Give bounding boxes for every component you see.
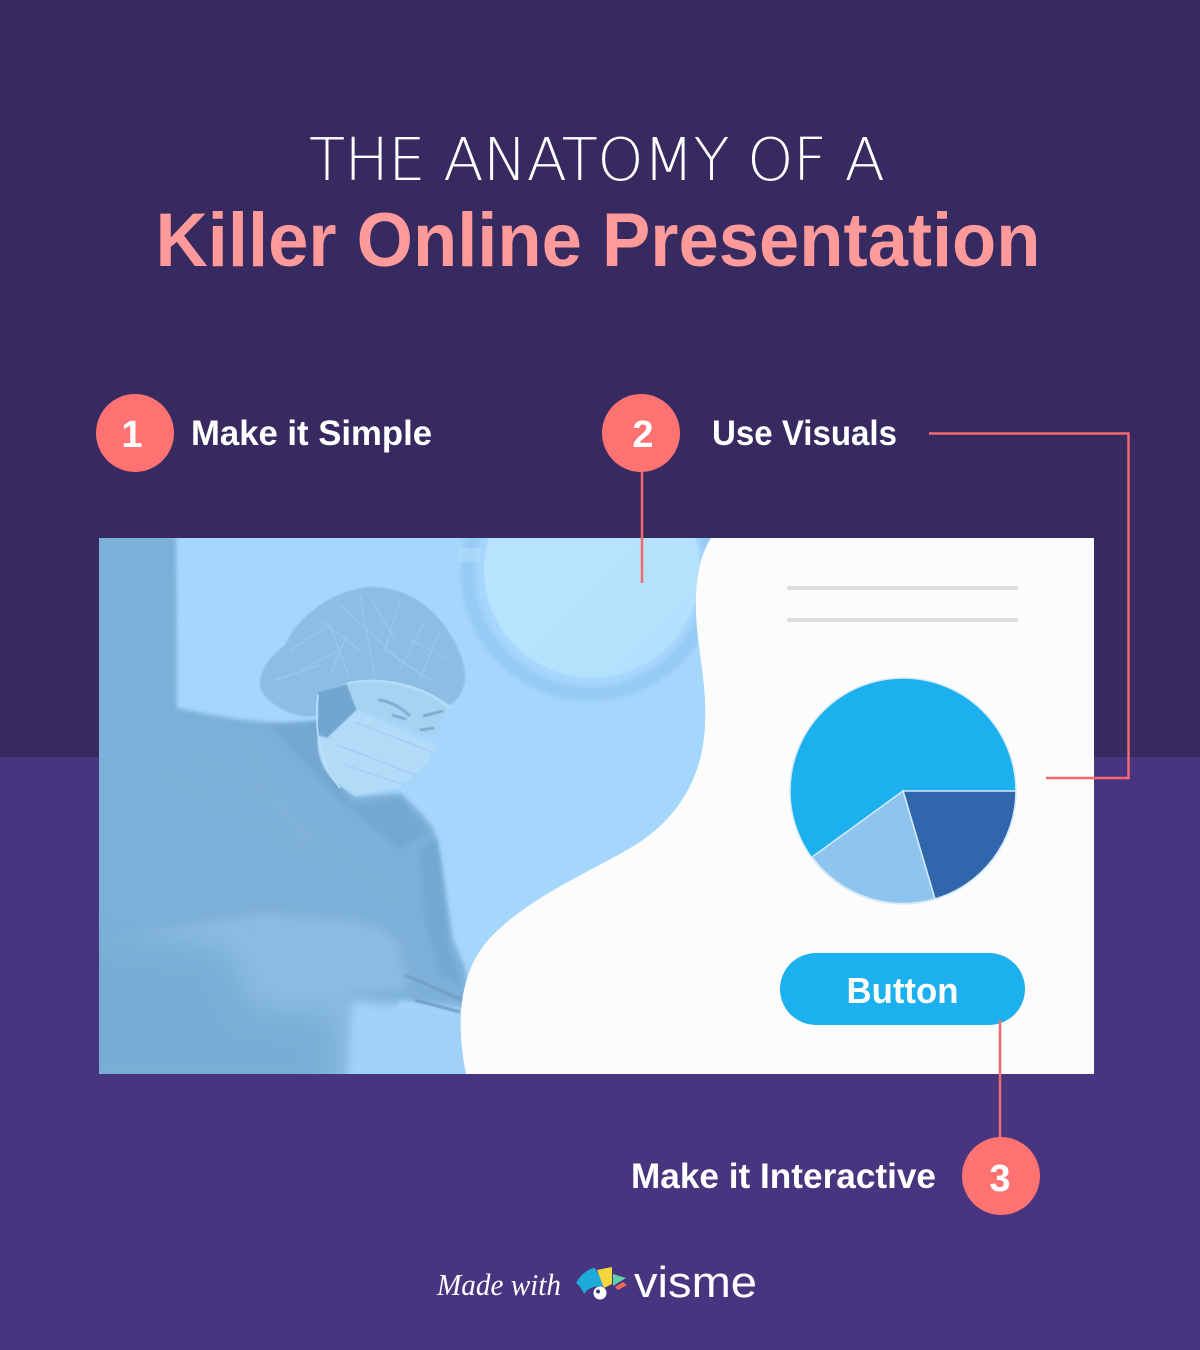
connector: button to badge 3 [999, 1020, 1001, 1140]
title [156, 125, 1040, 283]
lower right lighter patch [342, 998, 466, 1074]
background: top band [0, 0, 1200, 757]
visme wordmark: visme [634, 1258, 757, 1307]
icon: visme logo [576, 1267, 627, 1300]
label: make it interactive: Make it Interactive [631, 1157, 936, 1196]
hair cap [260, 587, 465, 716]
surgical lamp [462, 538, 711, 700]
callout 3: 3 [989, 1158, 1011, 1200]
badge 3 [962, 1137, 1040, 1215]
title line 1: THE ANATOMY OF A [309, 125, 885, 194]
instrument [405, 975, 462, 1012]
button: Button [846, 970, 958, 1011]
footer branding [436, 1258, 757, 1307]
photo: surgeon in blue duotone [99, 538, 711, 1074]
callout 3 [631, 1137, 1040, 1215]
surgical mask [317, 695, 437, 796]
made with: Made with [436, 1267, 561, 1302]
body shading [276, 722, 422, 844]
connector: badge 2 to photo [641, 470, 643, 583]
connector: use visuals to pie [929, 434, 1128, 778]
button [780, 953, 1025, 1025]
pie chart [790, 678, 1016, 904]
blurred dark foreground [99, 936, 334, 1074]
label: make it simple: Make it Simple [191, 414, 432, 453]
title line 2: Killer Online Presentation [156, 198, 1040, 283]
callout 2: 2 [632, 414, 654, 456]
panel: slide mockup [99, 538, 1094, 1074]
label: use visuals: Use Visuals [712, 414, 897, 453]
slide white background [99, 538, 1094, 1074]
badge 2 [602, 394, 680, 472]
face and neck [318, 682, 447, 738]
callout 1 [96, 394, 432, 472]
background: bottom band [0, 757, 1200, 1350]
dark left column and torso base [99, 538, 468, 1074]
blurred foreground arm [172, 915, 404, 1033]
text placeholder lines [787, 586, 1018, 622]
callout 2 [602, 394, 897, 472]
badge 1 [96, 394, 174, 472]
callout 1: 1 [121, 414, 143, 456]
